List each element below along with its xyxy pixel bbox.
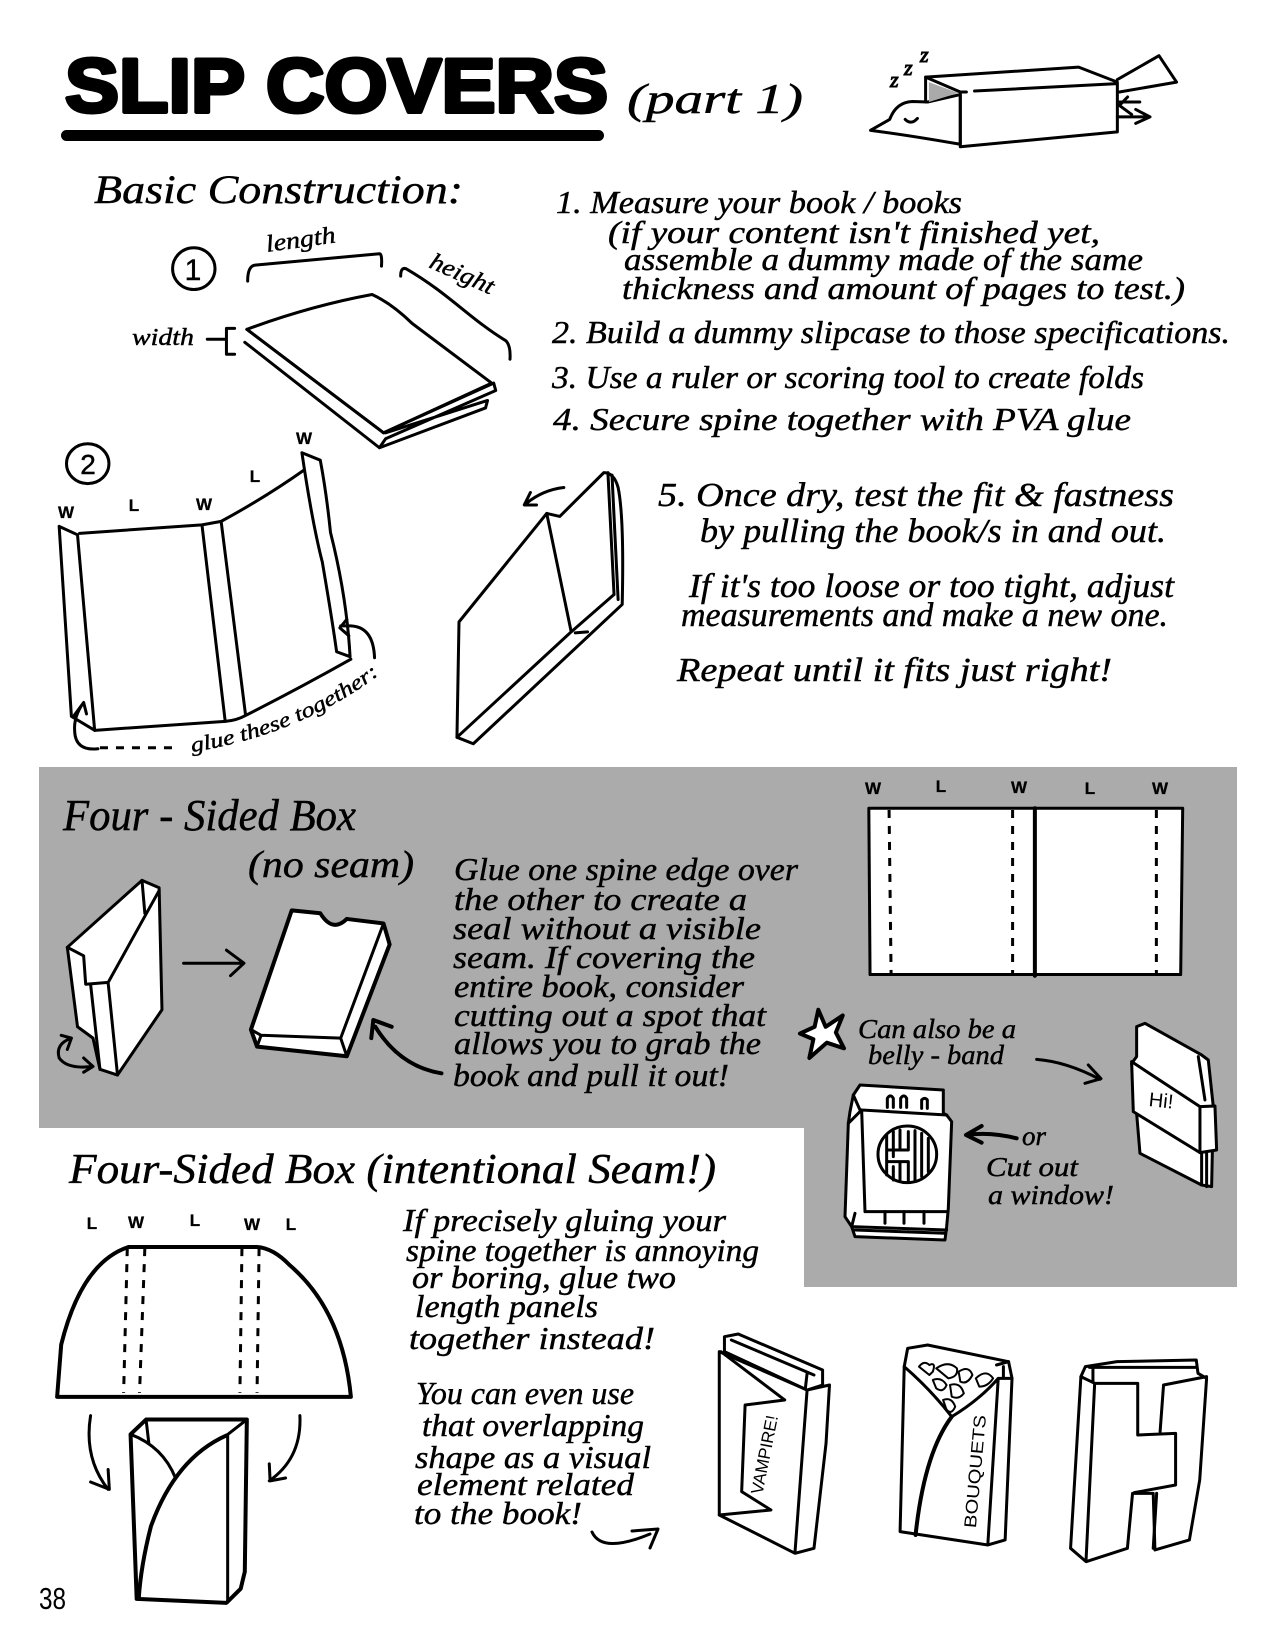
labels: flat template: L — [129, 496, 139, 515]
text: glue one spine edge: seam. If covering the — [453, 939, 755, 975]
heading: four-sided box no seam: (no seam) — [248, 844, 414, 886]
labels: flat box template — [865, 777, 1169, 798]
labels: length height width — [132, 222, 500, 351]
diagram: curved flap template — [57, 1247, 351, 1397]
text: if precisely gluing: together instead! — [409, 1320, 655, 1356]
arrows: fold down — [89, 1416, 300, 1489]
text: belly band: Can also be a — [858, 1014, 1016, 1044]
arrow to belly band — [1037, 1059, 1101, 1083]
labels: curved flap template: L — [87, 1214, 97, 1233]
example: bouquets book: BOUQUETS — [961, 1414, 990, 1529]
text: you can even use: element related — [417, 1466, 635, 1502]
labels: flat template: glue these together: — [192, 668, 376, 756]
text: belly band — [858, 1014, 1016, 1070]
icon: zzz: z — [919, 42, 929, 67]
labels: flat template: 2 — [80, 449, 96, 480]
diagram: folded slipcase with book — [457, 473, 623, 744]
step 5 text: by pulling the book/s in and out. — [700, 513, 1166, 550]
icon: zzz: z — [889, 67, 899, 92]
text: glue one spine edge: Glue one spine edge over — [454, 851, 799, 887]
example: vampire book — [719, 1334, 829, 1553]
heading: four-sided box no seam — [62, 791, 414, 886]
diagram: box with overlapping seam — [131, 1420, 247, 1603]
text: cut out a window: or — [1022, 1121, 1046, 1151]
text: cut out a window: Cut out — [986, 1152, 1080, 1182]
text: cut out a window — [986, 1121, 1114, 1210]
labels: curved flap template: W — [128, 1213, 145, 1232]
labels: flat template: W — [196, 495, 213, 514]
icon: zzz: z — [903, 55, 913, 80]
text: glue one spine edge: allows you to grab the — [454, 1025, 761, 1061]
heading: four-sided box intentional seam: Four-Sided Box (intentional Seam!) — [68, 1147, 716, 1193]
text: if precisely gluing: length panels — [415, 1288, 598, 1324]
text: if precisely gluing: spine together is annoying — [406, 1232, 759, 1268]
arrow to thumb notch — [371, 1020, 441, 1073]
arrow to sleeve — [184, 950, 244, 976]
heading: basic construction: Basic Construction: — [94, 167, 463, 212]
text: you can even use: to the book! — [414, 1495, 582, 1531]
text: you can even use: that overlapping — [422, 1407, 644, 1443]
steps 1 to 4: 2. Build a dummy slipcase to those specifications. — [552, 314, 1230, 350]
arrow to examples — [592, 1529, 658, 1548]
labels: length height width: width — [132, 325, 194, 351]
text: you can even use: You can even use — [416, 1375, 634, 1411]
steps 1 to 4: (if your content isn't finished yet, — [608, 214, 1100, 250]
labels: flat template — [58, 429, 376, 756]
diagram: window cut-out book — [845, 1085, 952, 1240]
labels: flat template: L — [250, 467, 260, 486]
text: glue one spine edge: the other to create a — [454, 881, 747, 917]
diagram: flat box template — [869, 808, 1183, 976]
labels: curved flap template: W — [244, 1215, 261, 1234]
step 5 text: 5. Once dry, test the fit & fastness — [658, 477, 1174, 514]
text: glue one spine edge: seal without a visible — [453, 910, 761, 946]
diagram: belly band book: Hi! — [1148, 1089, 1174, 1114]
step 5 text — [658, 477, 1176, 689]
text: if precisely gluing: or boring, glue two — [412, 1259, 676, 1295]
labels: flat box template: L — [936, 777, 946, 796]
text: glue one spine edge: entire book, consider — [454, 968, 745, 1004]
labels: curved flap template: L — [190, 1211, 200, 1230]
labels: length height width: 1 — [185, 254, 201, 287]
page number: 38 — [39, 1581, 66, 1616]
diagram: belly band book — [1132, 1023, 1217, 1187]
labels: flat box template: W — [865, 779, 882, 798]
icon: zzz — [889, 42, 929, 92]
text: glue one spine edge — [453, 851, 799, 1093]
diagram: open box — [58, 880, 162, 1075]
steps 1 to 4: 3. Use a ruler or scoring tool to create folds — [551, 359, 1144, 395]
step 5 text: Repeat until it fits just right! — [676, 652, 1112, 689]
text: you can even use: shape as a visual — [415, 1439, 651, 1475]
labels: curved flap template — [87, 1211, 296, 1234]
steps 1 to 4: 4. Secure spine together with PVA glue — [553, 401, 1131, 437]
text: you can even use — [414, 1375, 651, 1531]
text: glue one spine edge: book and pull it out! — [453, 1057, 729, 1093]
diagram: book measurements — [173, 248, 510, 448]
title: SLIP COVERS — [65, 44, 608, 129]
labels: curved flap template: L — [286, 1215, 296, 1234]
labels: flat template: W — [296, 429, 313, 448]
text: cut out a window: a window! — [988, 1180, 1114, 1210]
example: vampire book: VAMPIRE! — [747, 1414, 782, 1496]
text: if precisely gluing — [402, 1202, 759, 1356]
text: if precisely gluing: If precisely gluing your — [402, 1202, 727, 1238]
icon: star — [800, 1010, 844, 1058]
diagram: flat slipcase template — [59, 444, 375, 749]
example: h shape book — [1071, 1360, 1207, 1562]
labels: flat template: W — [58, 503, 75, 522]
steps 1 to 4 — [551, 184, 1230, 437]
labels: flat box template: L — [1085, 779, 1095, 798]
gray panel background — [39, 767, 1237, 1287]
step 5 text: If it's too loose or too tight, adjust — [688, 568, 1176, 605]
labels: length height width: height — [426, 249, 500, 301]
steps 1 to 4: assemble a dummy made of the same — [624, 241, 1143, 277]
subtitle: part 1: (part 1) — [627, 77, 803, 123]
steps 1 to 4: thickness and amount of pages to test.) — [622, 270, 1185, 306]
example: bouquets book — [900, 1345, 1012, 1545]
steps 1 to 4: 1. Measure your book / books — [556, 184, 962, 220]
text: belly band: belly - band — [868, 1040, 1005, 1070]
labels: flat box template: W — [1011, 778, 1028, 797]
step 5 text: measurements and make a new one. — [681, 597, 1168, 634]
text: glue one spine edge: cutting out a spot that — [454, 997, 767, 1033]
heading: four-sided box no seam: Four - Sided Box — [62, 791, 356, 840]
icon: sleeping bird in a slipcase — [871, 56, 1177, 147]
labels: length height width: length — [264, 222, 337, 258]
arrow to window book — [966, 1126, 1017, 1143]
diagram: closed box sleeve — [251, 910, 390, 1056]
labels: flat box template: W — [1152, 779, 1169, 798]
